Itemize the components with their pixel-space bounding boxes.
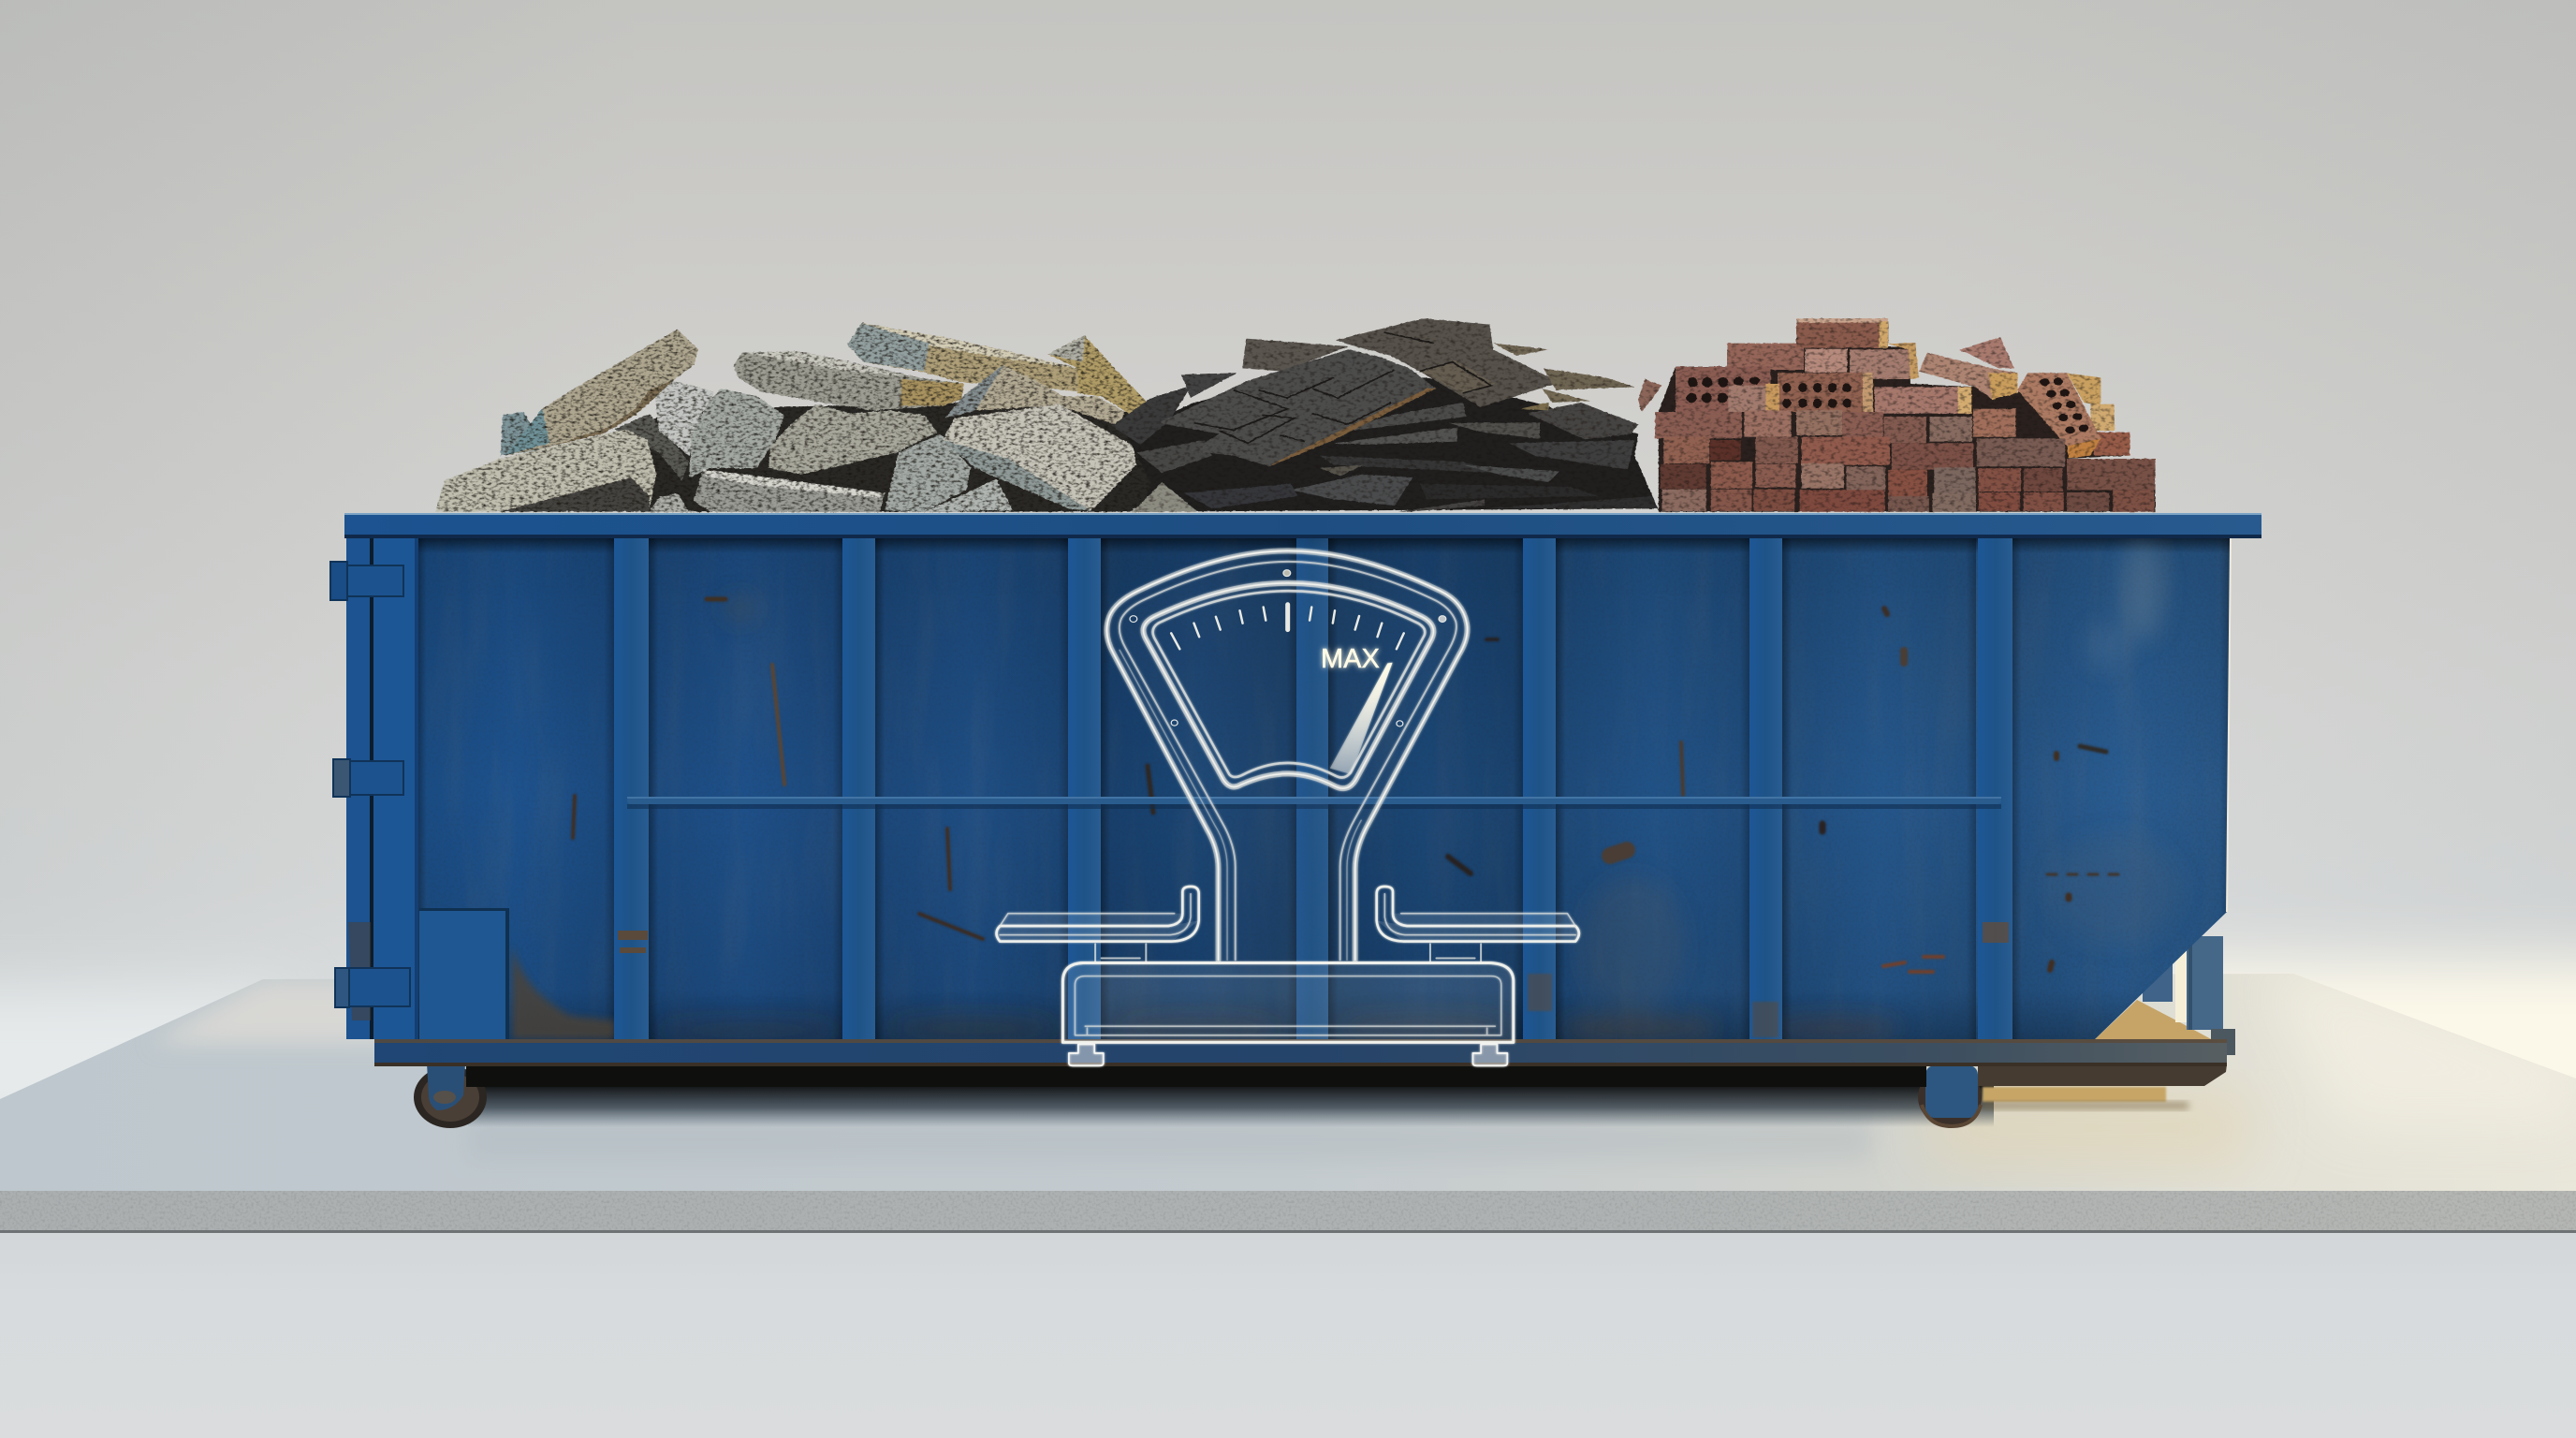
shadow under dumpster: [468, 1084, 2188, 1127]
horizontal tie rod: [627, 797, 2001, 809]
scale: left pan: [997, 887, 1199, 942]
vertical ribs: [614, 538, 2012, 1039]
rubble: concrete: [435, 323, 1161, 512]
scale: base: [1062, 962, 1514, 1042]
wheel: left caster: [414, 1064, 487, 1128]
wheel: right caster: [1918, 1065, 1982, 1126]
scale: frame: [1106, 550, 1468, 960]
body panels: [346, 538, 2232, 1044]
dumpster: [330, 513, 2261, 1128]
scale: feet: [1069, 1044, 1507, 1065]
rear supports of the dumpster: [2095, 936, 2235, 1055]
light on floor behind slab: [0, 964, 2576, 1142]
foreground floor: [0, 1233, 2576, 1438]
scale: rivets: [1130, 570, 1446, 726]
bottom beam: [374, 1039, 2227, 1087]
door hinges: [330, 562, 410, 1007]
concrete slab: [0, 974, 2576, 1233]
rust streaks and scratches: [573, 599, 2128, 972]
rubble: asphalt shingles: [1112, 318, 1658, 512]
top rail: [344, 513, 2261, 538]
scale: dial ticks: [1171, 605, 1404, 649]
scale: MAX label: MAX: [1321, 644, 1380, 674]
scale: dial window: [1143, 583, 1433, 788]
door corner plate: [419, 908, 508, 1039]
weathering stains: [655, 538, 2181, 1039]
rubble: bricks: [1638, 318, 2156, 512]
edge highlight: [2227, 538, 2231, 912]
scale: right pan: [1377, 887, 1579, 942]
left door: [346, 513, 509, 1039]
scale: glass fills: [997, 550, 1579, 1042]
glass scale: [997, 550, 1579, 1065]
scale: needle: [1330, 663, 1393, 774]
rust on ribs: [618, 922, 2009, 1037]
scale: pan supports: [1095, 944, 1481, 961]
